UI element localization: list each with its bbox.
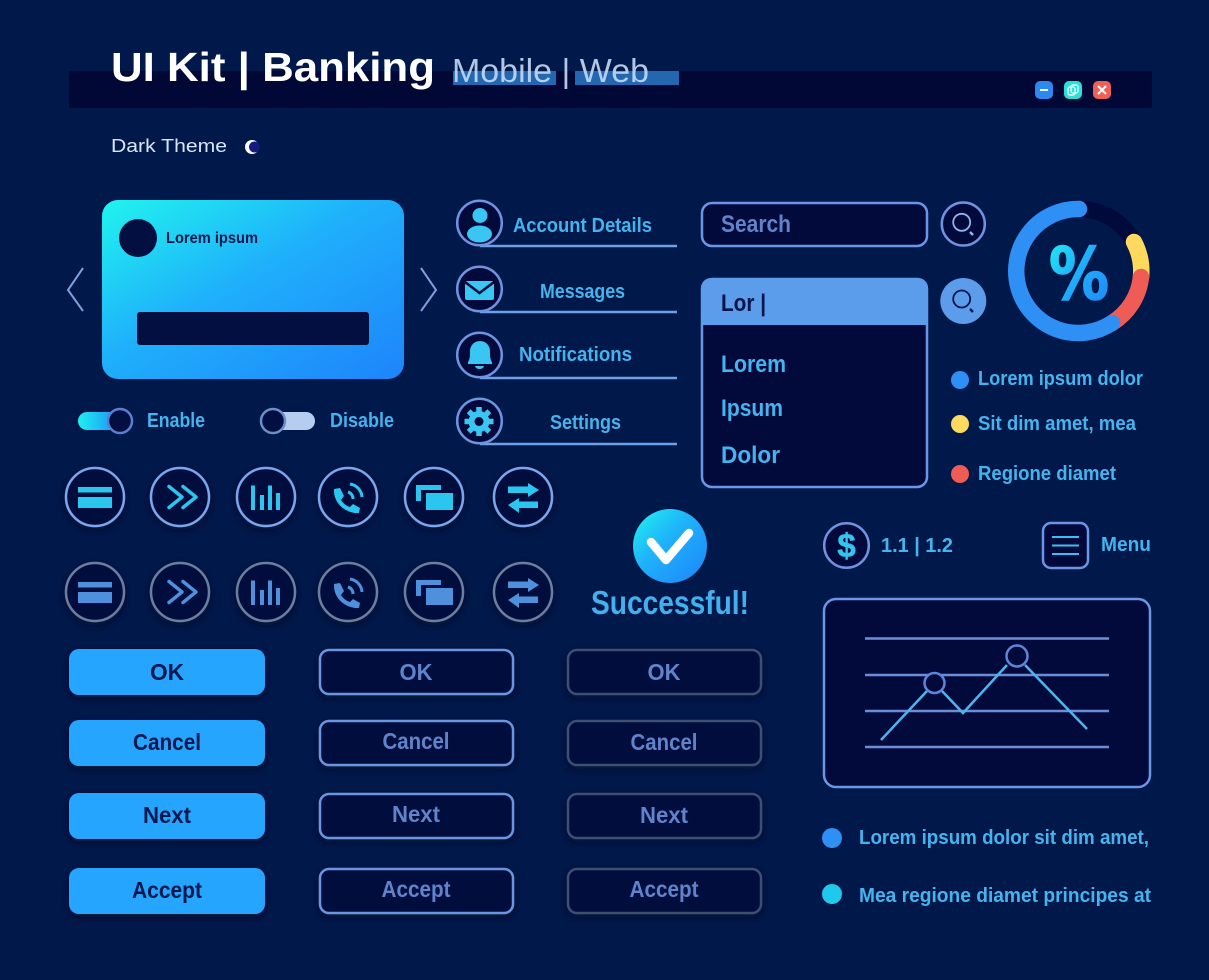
button column: disabled: OK (648, 659, 681, 685)
icon: phone (319, 468, 377, 526)
button column: disabled: Cancel (630, 729, 698, 755)
search dropdown: Ipsum (721, 395, 783, 422)
search field: Search (721, 211, 791, 238)
search dropdown (701, 278, 928, 487)
currency selector: 1.1 | 1.2 (881, 535, 953, 557)
menu item: messages: Messages (540, 281, 625, 303)
toggle: disable (261, 409, 394, 433)
window controls (1035, 81, 1111, 99)
search button: filled (940, 278, 986, 324)
button column: outlined: Accept (382, 876, 451, 902)
button column: filled: Accept (132, 877, 202, 903)
toggle: enable: Enable (147, 410, 205, 432)
success message: Successful! (591, 584, 749, 621)
icon: card (66, 468, 124, 526)
icon: bars (237, 468, 295, 526)
bullet text list: Mea regione diamet principes at (859, 885, 1151, 907)
button column: outlined: OK (400, 659, 433, 685)
donut chart: % (1049, 232, 1109, 316)
search dropdown: Lor | (721, 290, 766, 317)
icon: windows (405, 468, 463, 526)
icon: bars (237, 563, 295, 621)
legend: Regione diamet (978, 463, 1116, 485)
menu item: settings: Settings (550, 412, 621, 434)
search field (702, 203, 927, 246)
theme label: Dark Theme (111, 135, 227, 156)
menu button: Menu (1101, 534, 1151, 556)
icon: moon (245, 140, 260, 154)
icon: transfer arrows (494, 468, 552, 526)
panel: card (102, 200, 404, 379)
icon row: active (66, 468, 552, 526)
menu item: notifications: Notifications (519, 344, 632, 366)
icon: windows (405, 563, 463, 621)
button column: disabled (568, 650, 761, 913)
button column: filled: OK (150, 659, 184, 685)
legend: Lorem ipsum dolor (978, 368, 1143, 390)
line chart (824, 599, 1150, 787)
button column: filled (69, 649, 265, 914)
toggle: disable: Disable (330, 410, 394, 432)
currency selector: $ (837, 527, 856, 564)
menu item: notifications (457, 333, 677, 378)
button column: outlined: Cancel (382, 728, 450, 754)
toggle: enable (78, 409, 205, 433)
header band (69, 71, 1152, 108)
legend (951, 368, 1143, 485)
button column: disabled: Accept (630, 876, 699, 902)
title: UI Kit | Banking (111, 44, 435, 90)
button column: outlined: Next (392, 801, 440, 827)
icon: transfer arrows (494, 563, 552, 621)
menu item: messages (457, 267, 677, 312)
success message (591, 509, 749, 621)
button column: outlined (320, 650, 513, 913)
search dropdown: Lorem (721, 351, 786, 378)
button column: filled: Next (143, 802, 191, 828)
icon row: inactive (66, 563, 552, 621)
menu item: account details (457, 201, 677, 246)
legend: Sit dim amet, mea (978, 413, 1137, 435)
icon: double chevron (151, 563, 209, 621)
menu item: settings (457, 399, 677, 444)
subtitle: Mobile | Web (452, 52, 649, 89)
button column: filled: Cancel (133, 729, 201, 755)
bullet text list: Lorem ipsum dolor sit dim amet, (859, 827, 1149, 849)
left chevron (68, 268, 83, 311)
donut chart (1016, 209, 1141, 333)
panel: card: Lorem ipsum (166, 230, 258, 247)
icon: double chevron (151, 468, 209, 526)
search button: outline (942, 202, 985, 246)
menu item: account details: Account Details (513, 215, 652, 237)
icon: phone (319, 563, 377, 621)
menu button (1043, 523, 1151, 568)
button column: disabled: Next (640, 802, 688, 828)
currency selector (824, 523, 953, 568)
search dropdown: Dolor (721, 442, 780, 469)
bullet text list (822, 827, 1151, 907)
right chevron (421, 268, 436, 311)
icon: card (66, 563, 124, 621)
